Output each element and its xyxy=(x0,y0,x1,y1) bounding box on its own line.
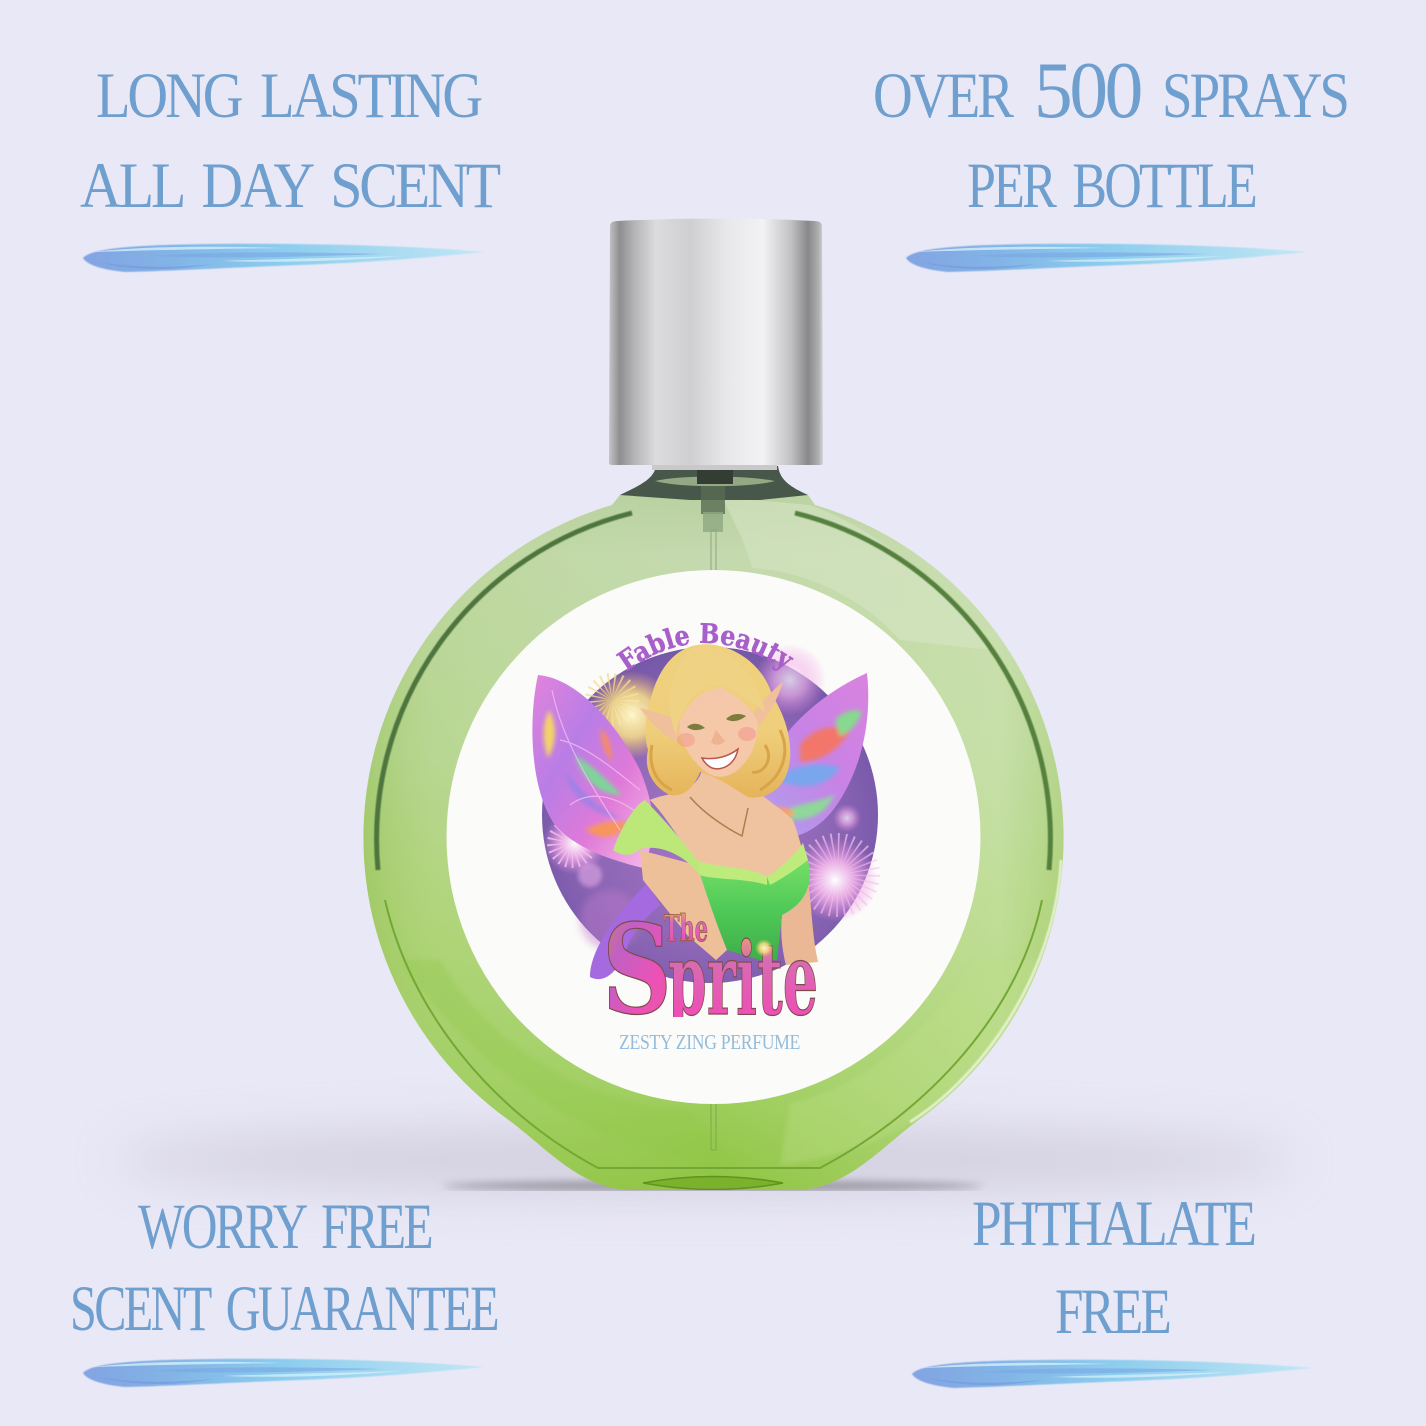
white label xyxy=(446,570,980,1104)
fairy facial features xyxy=(677,714,756,769)
fairy neck and chest xyxy=(650,768,808,890)
green dress xyxy=(697,850,810,960)
lower right contour line xyxy=(713,900,1042,1168)
fairy left arm xyxy=(640,850,727,960)
product name: ZESTY ZING PERFUME xyxy=(619,1030,800,1054)
purple firework disc xyxy=(542,647,878,983)
feature: long lasting all day scent: ALL DAY SCENT xyxy=(80,150,500,222)
fairy hair fringe xyxy=(669,645,765,735)
brush stroke underline: bottom right xyxy=(912,1360,1314,1388)
feature: phthalate free: FREE xyxy=(1055,1276,1170,1348)
left wing xyxy=(532,675,653,868)
feature: long lasting all day scent xyxy=(80,60,500,222)
fairy hair curls xyxy=(651,730,785,790)
brush stroke underline: bottom left xyxy=(83,1359,485,1387)
feature: over 500 sprays per bottle: PER BOTTLE xyxy=(967,150,1256,222)
collar ring xyxy=(652,465,777,470)
fairy hair back xyxy=(646,644,790,798)
feature: over 500 sprays per bottle: 500 xyxy=(1034,45,1141,135)
yellow sparkle xyxy=(755,939,773,957)
feature: long lasting all day scent: LONG LASTING xyxy=(96,60,481,132)
fable beauty wordmark: Fable Beauty xyxy=(616,622,794,672)
light green sleeve xyxy=(613,800,700,875)
fairy necklace xyxy=(690,797,748,836)
fairy illustration xyxy=(532,622,880,1043)
fairy face xyxy=(680,688,758,777)
brush stroke underline: top right xyxy=(906,244,1308,272)
left rim band xyxy=(377,513,632,870)
neck dark collar xyxy=(620,466,808,500)
perfume bottle xyxy=(360,218,1070,1200)
feature: worry free scent guarantee: SCENT GUARANTEE xyxy=(70,1273,498,1345)
dress trim xyxy=(695,843,808,885)
feature: worry free scent guarantee xyxy=(70,1191,498,1345)
spray tube xyxy=(697,468,733,1150)
brush stroke underline: top left xyxy=(83,244,485,272)
glass reflections xyxy=(360,480,1070,1200)
feature: phthalate free xyxy=(972,1188,1255,1348)
feature: over 500 sprays per bottle xyxy=(873,45,1347,222)
the sprite wordmark: prite xyxy=(668,920,818,1038)
floor shadow xyxy=(115,1126,1295,1194)
right rim band xyxy=(795,513,1050,870)
fairy right arm xyxy=(781,880,818,965)
fireworks xyxy=(543,644,877,950)
bottle glass body xyxy=(363,468,1064,1190)
feature: over 500 sprays per bottle: OVER xyxy=(873,60,1015,132)
lower left contour line xyxy=(385,900,713,1168)
lower left wing xyxy=(590,883,660,979)
silver cap xyxy=(609,218,823,465)
the sprite wordmark: S xyxy=(602,898,672,1043)
right wing xyxy=(745,673,868,839)
the sprite wordmark xyxy=(608,912,816,1017)
the sprite wordmark: The xyxy=(664,908,708,950)
feature: over 500 sprays per bottle: SPRAYS xyxy=(1162,60,1347,132)
feature: phthalate free: PHTHALATE xyxy=(972,1188,1255,1260)
feature: worry free scent guarantee: WORRY FREE xyxy=(138,1191,432,1263)
right rim highlight xyxy=(910,860,1061,1122)
fairy ears xyxy=(640,682,783,742)
neck glass highlight xyxy=(655,476,775,486)
